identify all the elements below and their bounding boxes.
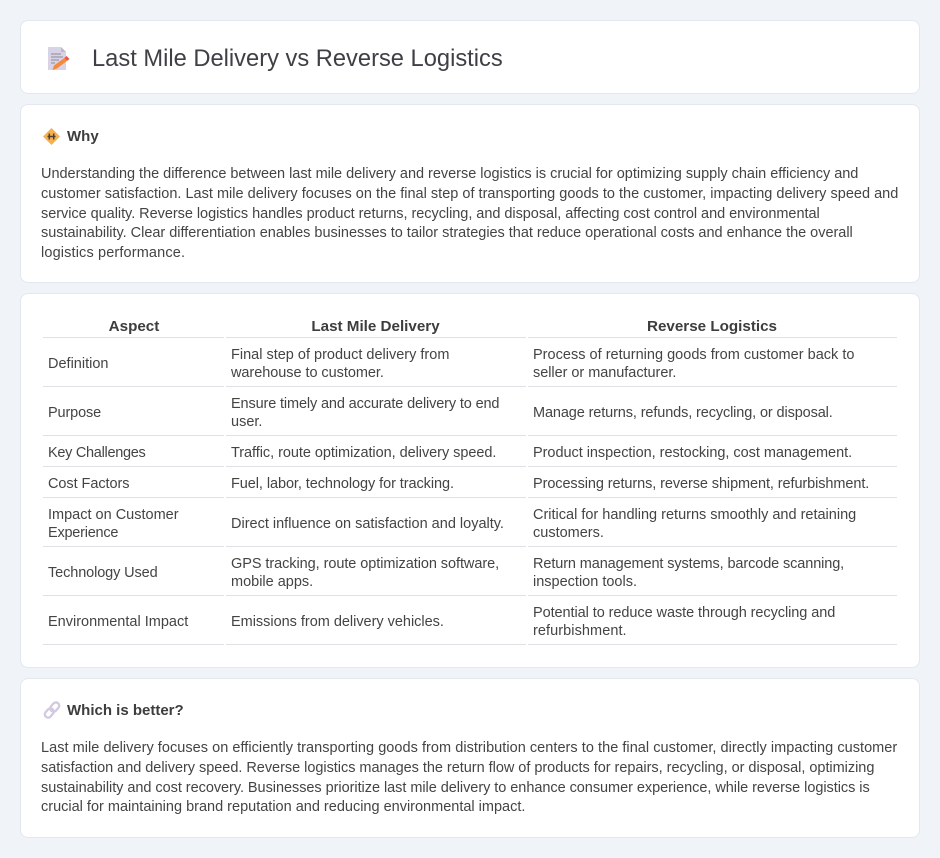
which is better paragraph: Last mile delivery focuses on efficiently transporting goods from distribution centers to the final customer, directly impacting customer: [41, 740, 897, 756]
row: environmental impact: Potential to reduce waste through recycling and: [533, 605, 835, 621]
row: impact on customer experience: Direct influence on satisfaction and loyalty.: [231, 516, 504, 532]
which is better paragraph: crucial for maintaining brand reputation and reducing environmental impact.: [41, 799, 525, 815]
row: environmental impact: [43, 605, 897, 645]
why paragraph: service quality. Reverse logistics handles product returns, recycling, and disposal, affecting cost control and environmental: [41, 206, 820, 222]
row: purpose: user.: [231, 414, 262, 430]
row: impact on customer experience: Impact on Customer: [48, 507, 179, 523]
which is better paragraph: satisfaction and delivery speed. Reverse logistics manages the return flow of products for repairs, recycling, or disposal, optimizing: [41, 760, 874, 776]
row: definition: Definition: [48, 356, 108, 372]
row: technology used: GPS tracking, route optimization software,: [231, 556, 499, 572]
row: environmental impact: refurbishment.: [533, 623, 627, 639]
row: technology used: [43, 556, 897, 596]
why paragraph: logistics performance.: [41, 245, 185, 261]
row: impact on customer experience: Experience: [48, 525, 118, 541]
row: purpose: [43, 396, 897, 436]
row: cost factors: [43, 476, 897, 498]
heading: why: Why: [67, 128, 99, 145]
row: environmental impact: Emissions from delivery vehicles.: [231, 614, 444, 630]
why paragraph: Understanding the difference between last mile delivery and reverse logistics is crucial for optimizing supply chain efficiency and: [41, 166, 858, 182]
row: key challenges: [43, 445, 897, 467]
row: cost factors: Processing returns, reverse shipment, refurbishment.: [533, 476, 869, 492]
row: impact on customer experience: customers.: [533, 525, 604, 541]
title: Last Mile Delivery vs Reverse Logistics: [92, 46, 503, 72]
row: definition: warehouse to customer.: [231, 365, 384, 381]
row: purpose: Manage returns, refunds, recycling, or disposal.: [533, 405, 833, 421]
panel: which is better: [20, 678, 920, 838]
row: definition: Process of returning goods from customer back to: [533, 347, 854, 363]
row: cost factors: Fuel, labor, technology for tracking.: [231, 476, 454, 492]
icon: warning diamond: [43, 128, 60, 145]
which is better paragraph: [41, 740, 897, 815]
why paragraph: [41, 166, 898, 261]
row: definition: Final step of product delivery from: [231, 347, 449, 363]
table header row: Last Mile Delivery: [311, 318, 440, 335]
heading: which is better: Which is better?: [67, 702, 184, 719]
row: impact on customer experience: [43, 507, 897, 547]
which is better paragraph: sustainability and cost recovery. Businesses prioritize last mile delivery to enhance consumer experience, while reverse logistics is: [41, 780, 870, 796]
panel: why: [20, 104, 920, 283]
row: purpose: Ensure timely and accurate delivery to end: [231, 396, 499, 412]
row: technology used: Return management systems, barcode scanning,: [533, 556, 844, 572]
row: definition: seller or manufacturer.: [533, 365, 676, 381]
row: key challenges: Traffic, route optimization, delivery speed.: [231, 445, 496, 461]
row: technology used: Technology Used: [48, 565, 158, 581]
panel: comparison table: [20, 293, 920, 668]
table header row: Aspect: [109, 318, 159, 335]
icon: link: [44, 701, 60, 719]
row: environmental impact: Environmental Impact: [48, 614, 188, 630]
row: definition: [43, 347, 897, 387]
row: cost factors: Cost Factors: [48, 476, 129, 492]
row: technology used: inspection tools.: [533, 574, 637, 590]
row: key challenges: Key Challenges: [48, 445, 146, 461]
icon: memo with pencil: [48, 47, 70, 70]
row: technology used: mobile apps.: [231, 574, 313, 590]
panel: title header: [20, 20, 920, 94]
why paragraph: customer satisfaction. Last mile delivery focuses on the final step of transporting goods to the customer, impacting delivery speed and: [41, 186, 898, 202]
row: impact on customer experience: Critical for handling returns smoothly and retaining: [533, 507, 856, 523]
table header row: Reverse Logistics: [647, 318, 777, 335]
row: purpose: Purpose: [48, 405, 101, 421]
row: key challenges: Product inspection, restocking, cost management.: [533, 445, 852, 461]
why paragraph: sustainability. Clear differentiation enables businesses to tailor strategies that reduce operational costs and enhance the overall: [41, 225, 853, 241]
table header row: [43, 318, 897, 338]
